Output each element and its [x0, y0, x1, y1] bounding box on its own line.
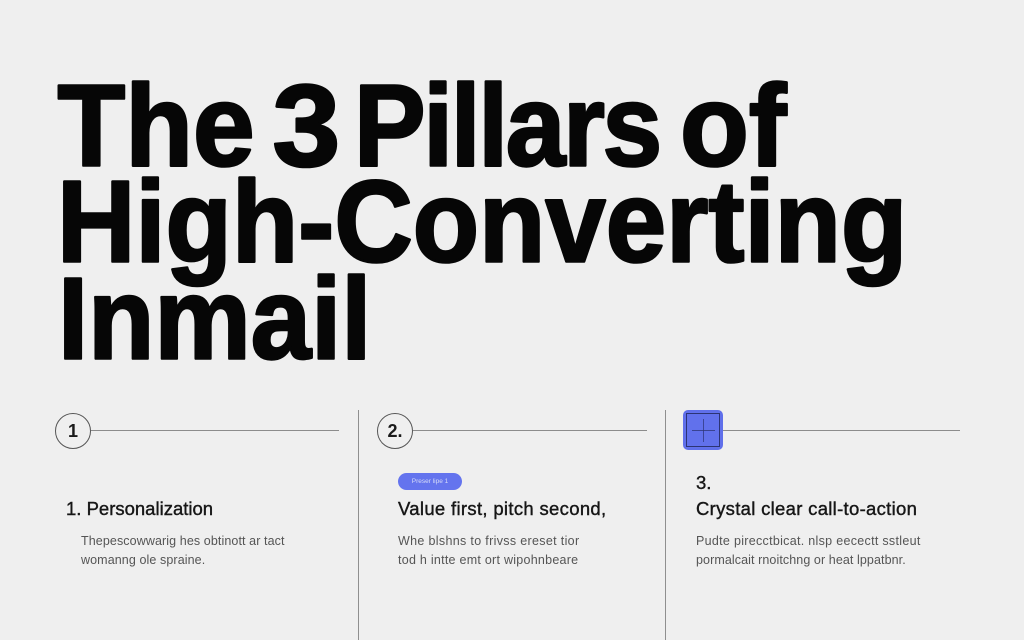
title: [57, 61, 907, 383]
panel: pillar 2: [377, 413, 647, 567]
body text 1: Thepescowwarig hes obtinott ar tact: [81, 534, 285, 548]
body text 3: Pudte pirecctbicat. nlsp eecectt sstleut: [696, 534, 921, 548]
divider left: [358, 410, 359, 640]
icon: blue square with crosshair: [683, 410, 723, 450]
heading: call to action: Crystal clear call-to-action: [696, 498, 917, 519]
body text 1: [81, 534, 285, 567]
title: Pillars: [354, 61, 660, 191]
number badge 2: [377, 413, 413, 449]
number badge 1: [55, 413, 91, 449]
body text 1: womanng ole spraine.: [81, 553, 205, 567]
title: High-Converting: [57, 156, 907, 286]
number badge 1: 1: [68, 421, 78, 441]
title: 3: [272, 61, 340, 191]
body text 2: Whe blshns to frivss ereset tior: [398, 534, 579, 548]
step number 3: 3.: [696, 472, 711, 493]
tag pill: Preser lipe 1: [412, 478, 448, 485]
panel: pillar 1: [55, 413, 339, 567]
divider right: [665, 410, 666, 640]
body text 2: tod h intte emt ort wipohnbeare: [398, 553, 578, 567]
title: Inmail: [58, 253, 371, 383]
body text 3: pormalcait rnoitchng or heat lppatbnr.: [696, 553, 906, 567]
heading: personalization: 1. Personalization: [66, 498, 213, 519]
title: of: [680, 61, 787, 191]
tag pill: [398, 473, 462, 490]
heading: value first: Value first, pitch second,: [398, 498, 606, 519]
title: The: [58, 61, 255, 191]
number badge 2: 2.: [387, 421, 402, 441]
body text 2: [398, 534, 579, 567]
body text 3: [696, 534, 921, 567]
panel: pillar 3: [683, 410, 960, 567]
